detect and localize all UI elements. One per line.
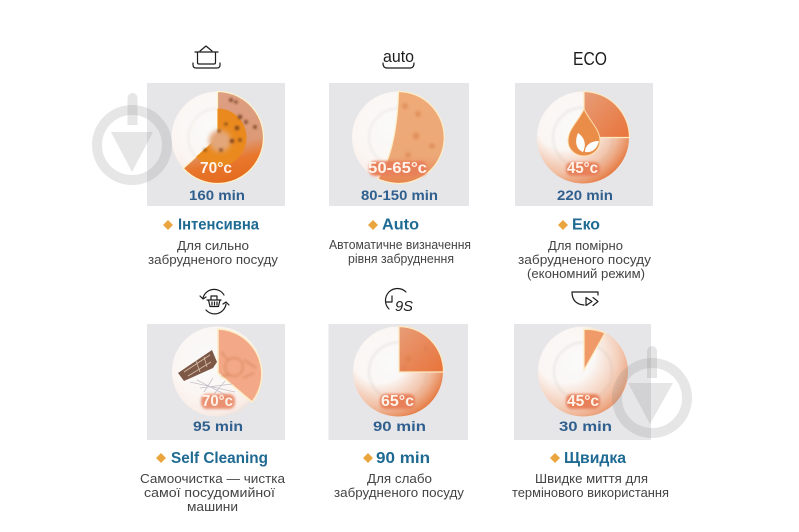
- icon: basket with rotating arrows: [200, 289, 229, 314]
- description: Intensive: забрудненого посуду: [148, 253, 279, 267]
- icon: 90 second timer: [385, 288, 413, 315]
- icon: pot: [193, 46, 220, 68]
- duration: 90 min: 90 min: [373, 418, 426, 434]
- diamond bullet: [550, 453, 560, 463]
- icon: quick wash: [572, 292, 598, 306]
- description: Quick: [512, 472, 669, 500]
- description: Self Cleaning: машини: [187, 500, 238, 514]
- plate: Self Cleaning: [172, 326, 262, 416]
- description: Quick: Швидке миття для: [535, 472, 648, 486]
- diamond bullet: [368, 220, 378, 230]
- description: Self Cleaning: самої посудомийної: [144, 486, 276, 500]
- description: Intensive: Для сильно: [177, 239, 249, 253]
- description: Auto: [329, 238, 471, 266]
- title: Self Cleaning: Self Cleaning: [171, 450, 268, 467]
- duration: 95 min: 95 min: [193, 418, 243, 434]
- description: 90 min: Для слабо: [367, 472, 432, 486]
- panel: Eco programme: [515, 83, 653, 206]
- temperature: 70°C: 70°c: [200, 160, 232, 177]
- title: Auto: Auto: [382, 216, 419, 234]
- panel: Intensive programme: [147, 83, 285, 206]
- panel: Self Cleaning programme: [147, 324, 285, 440]
- description: Quick: термінового використання: [512, 486, 669, 500]
- description: Eco: Для помірно: [548, 239, 623, 253]
- icon: auto: auto: [383, 47, 414, 66]
- duration: 80-150 min: 80-150 min: [361, 187, 438, 203]
- watermark: right download badge: [617, 346, 687, 433]
- title: Щвидка: Щвидка: [564, 450, 626, 467]
- title: 90 min: 90 min: [376, 450, 430, 467]
- description: Intensive: [148, 239, 279, 267]
- description: Eco: забрудненого посуду: [518, 253, 652, 267]
- description: Self Cleaning: Самоочистка — чистка: [140, 472, 285, 486]
- watermark: left download badge: [97, 93, 167, 180]
- plate: Eco: [537, 92, 630, 184]
- plate: Auto: [352, 92, 444, 184]
- description: Eco: [518, 239, 652, 281]
- diamond bullet: [363, 453, 373, 463]
- temperature: 65°C: 65°c: [381, 393, 414, 410]
- panel: Quick programme: [514, 324, 651, 440]
- diamond bullet: [558, 220, 568, 230]
- diamond bullet: [163, 220, 173, 230]
- temperature: 45°C: 45°c: [567, 160, 598, 177]
- plate: Intensive: [172, 92, 264, 184]
- diamond bullet: [156, 453, 166, 463]
- panel: Auto programme: [329, 83, 469, 206]
- description: Auto: рівня забруднення: [348, 252, 454, 266]
- rack remains: [178, 350, 217, 381]
- plate: Quick: [538, 326, 628, 416]
- title: Еко: [558, 216, 600, 234]
- duration: 220 min: 220 min: [557, 187, 613, 203]
- description: Eco: (економний режим): [527, 267, 645, 281]
- description: Self Cleaning: [140, 472, 285, 514]
- temperature: 50-65°C: 50-65°c: [368, 160, 427, 177]
- temperature: 70°C: 70°c: [202, 393, 233, 410]
- duration: 160 min: 160 min: [189, 187, 245, 203]
- icon: water drop with leaves: [568, 109, 600, 156]
- plate: 90 min: [353, 326, 444, 416]
- duration: 30 min: 30 min: [559, 418, 612, 434]
- icon: ECO: ECO: [573, 49, 607, 69]
- icon: 90 second timer: 9S: [395, 298, 413, 315]
- title: Інтенсивна: Інтенсивна: [178, 216, 259, 234]
- title: Еко: Еко: [572, 216, 600, 234]
- description: 90 min: [334, 472, 465, 500]
- description: Auto: Автоматичне визначення: [329, 238, 471, 252]
- description: 90 min: забрудненого посуду: [334, 486, 465, 500]
- temperature: 45°C: 45°c: [567, 393, 599, 410]
- panel: 90 min programme: [328, 324, 468, 440]
